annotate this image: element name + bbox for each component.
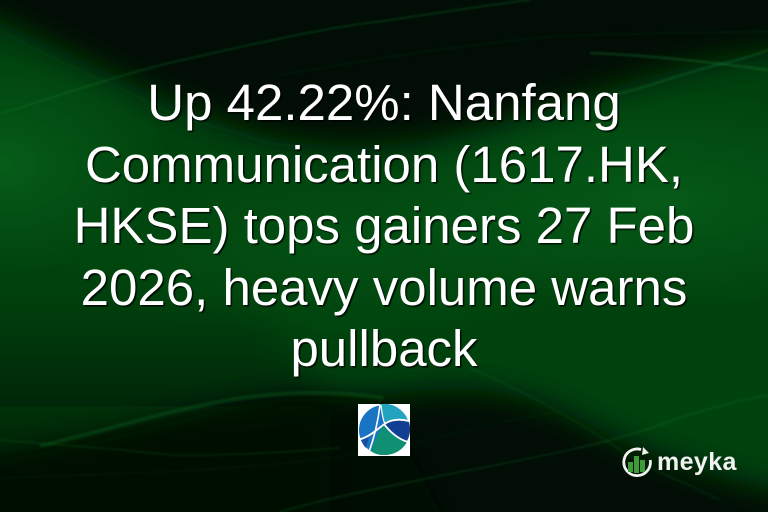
title: Up 42.22%: Nanfang (147, 74, 621, 131)
title (74, 74, 694, 378)
title: HKSE) tops gainers 27 Feb (74, 197, 694, 254)
icon: meyka mark (622, 447, 652, 477)
title: Communication (1617.HK, (85, 136, 683, 192)
title: 2026, heavy volume warns (81, 258, 687, 316)
brand name: meyka (657, 448, 737, 476)
brand: meyka logo (622, 447, 737, 477)
title: pullback (290, 320, 478, 377)
icon: company logo (358, 404, 410, 456)
